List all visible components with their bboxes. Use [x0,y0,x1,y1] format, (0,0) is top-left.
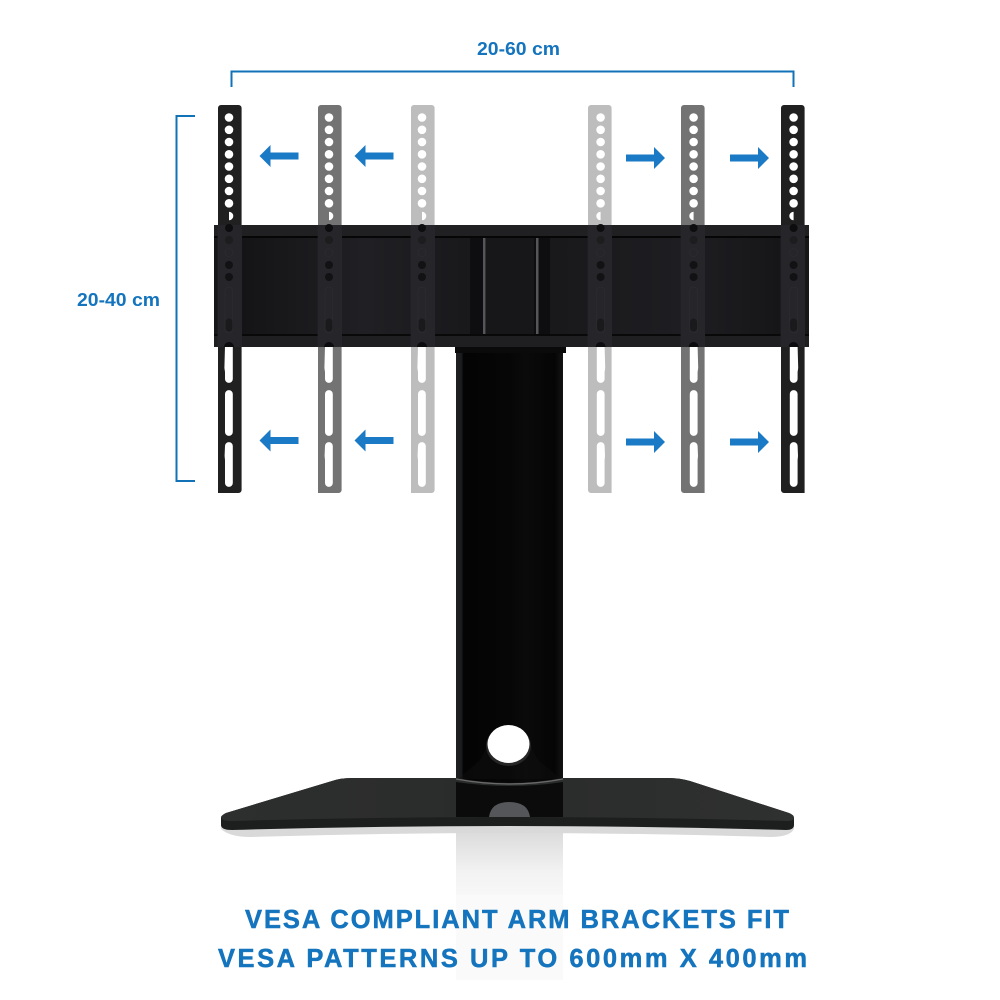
bracket: light left [411,105,435,493]
height label: 20-40 cm [77,289,160,310]
dimension: height line [77,116,195,481]
cable hole [486,725,531,766]
arrows: upper left [260,145,394,167]
bracket: light right [588,105,612,493]
arrows: upper right [626,147,769,169]
dimension: width line [232,38,794,87]
base reflection [221,822,794,980]
width label: 20-60 cm [477,38,560,59]
column reflection in base [456,782,563,817]
bracket: black left [218,105,242,493]
support column [455,346,566,784]
mounting beam [214,225,809,347]
cable hole reflection [489,802,530,817]
bracket: grey left [318,105,342,493]
arrows: lower left [260,430,394,452]
centre channel [470,238,550,334]
bracket: black right [781,105,805,493]
caption: VESA PATTERNS UP TO 600mm X 400mm [218,945,807,973]
collar [455,346,566,353]
arrows: lower right [626,431,769,453]
glass base [221,778,794,830]
bracket: grey right [681,105,705,493]
caption: VESA COMPLIANT ARM BRACKETS FIT [245,906,789,934]
caption [218,906,807,973]
